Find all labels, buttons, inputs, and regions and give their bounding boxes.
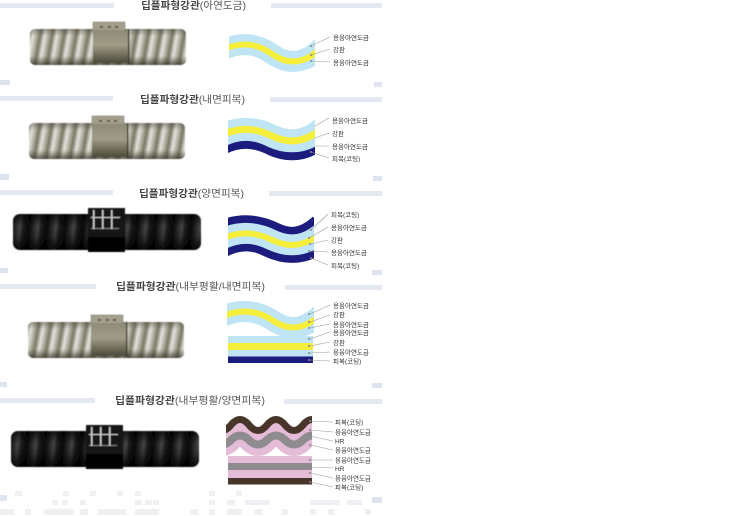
callout labels: 내면피복: 용융아연도금: [332, 116, 368, 125]
callout labels: 양면피복: 피복(코팅): [331, 261, 359, 270]
layer diagram: 아연도금: [219, 44, 325, 61]
callout labels: 내면피복: 강판: [332, 129, 344, 138]
callout labels: 아연도금: 강판: [333, 45, 345, 54]
callout labels: 내부평활/양면피복: 피복(코팅): [335, 418, 363, 426]
pipe photo: galvanized: [30, 22, 186, 65]
callout labels: 내면피복: 피복(코팅): [332, 154, 360, 163]
panel: 내면피복: [0, 93, 382, 163]
callout labels: 내부평활/내면피복: 용융아연도금: [333, 320, 369, 329]
title: 아연도금: 딥플파형강관 (아연도금): [141, 0, 246, 12]
panel: 내부평활/양면피복: [0, 394, 382, 492]
title: 내면피복: 딥플파형강관 (내면피복): [140, 93, 245, 106]
callout labels: 내부평활/양면피복: 용융아연도금: [335, 474, 371, 482]
panel: 아연도금: [0, 0, 382, 67]
title: 양면피복: 딥플파형강관 (양면피복): [139, 187, 244, 200]
callout labels: 양면피복: 강판: [331, 236, 343, 244]
callout labels: 내부평활/내면피복: 용융아연도금: [333, 348, 369, 356]
callout labels: 내부평활/내면피복: [308, 301, 369, 366]
background square pattern: [0, 80, 382, 515]
callout labels: 양면피복: 용융아연도금: [331, 248, 367, 257]
callout labels: 내부평활/내면피복: 피복(코팅): [333, 356, 361, 366]
callout labels: 양면피복: [308, 210, 367, 270]
pipe photo: smooth inner coated: [28, 315, 184, 358]
callout labels: 내부평활/내면피복: 용융아연도금: [333, 301, 369, 310]
callout labels: 아연도금: [310, 33, 369, 67]
callout labels: 내부평활/양면피복: 용융아연도금: [335, 428, 371, 436]
layer diagram: 내부평활/내면피복: [217, 310, 325, 363]
callout labels: 내부평활/내면피복: 강판: [333, 338, 345, 347]
pipe photo: both sides coated: [13, 208, 201, 252]
layer diagram: 내부평활/양면피복: [226, 416, 312, 484]
callout labels: 내부평활/양면피복: 용융아연도금: [335, 446, 371, 454]
pipe photo: smooth both sides coated: [11, 425, 199, 469]
callout labels: 양면피복: 피복(코팅): [331, 210, 359, 219]
callout labels: 내부평활/양면피복: HR: [335, 438, 345, 446]
panel: 양면피복: [0, 187, 382, 270]
pipe photo: inner coated: [29, 116, 185, 159]
callout labels: 아연도금: 용융아연도금: [333, 58, 369, 67]
callout labels: 양면피복: 용융아연도금: [331, 223, 367, 232]
panel: 내부평활/내면피복: [0, 280, 382, 366]
layer diagram: 양면피복: [218, 230, 325, 245]
callout labels: 내부평활/내면피복: 용융아연도금: [333, 328, 369, 337]
callout labels: 내부평활/양면피복: 용융아연도금: [335, 456, 371, 464]
callout labels: 내부평활/양면피복: HR: [335, 466, 345, 473]
callout labels: 아연도금: 용융아연도금: [333, 33, 369, 42]
callout labels: 내부평활/내면피복: 강판: [333, 310, 345, 319]
callout labels: 내면피복: [310, 116, 368, 163]
layer diagram: 내면피복: [218, 126, 325, 149]
callout labels: 내부평활/양면피복: [309, 418, 371, 492]
title: 내부평활/양면피복: 딥플파형강관 (내부평활/양면피복): [115, 394, 265, 407]
callout labels: 내면피복: 용융아연도금: [332, 142, 368, 151]
title: 내부평활/내면피복: 딥플파형강관 (내부평활/내면피복): [116, 280, 265, 293]
callout labels: 내부평활/양면피복: 피복(코팅): [335, 482, 363, 492]
